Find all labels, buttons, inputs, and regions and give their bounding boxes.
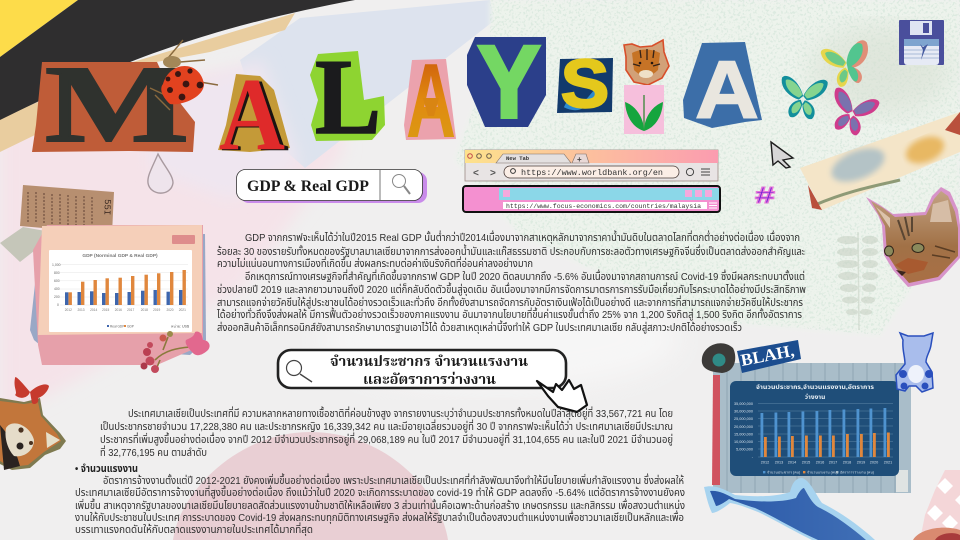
text block: population [100, 406, 673, 459]
chart: population and labour force: 2015 [802, 460, 810, 464]
text block: GDP explanation: ความไม่แน่นอนทางการเมืองที่เกิดขึ้น ส่งผลกระทบต่อค่าเงินริงกิตที่อ่อนค่าลงอย่างมาก [217, 256, 533, 270]
chart: population and labour force [730, 381, 899, 476]
title letter M [32, 43, 195, 165]
text block: labour force: บรรเทาแรงกดดันให้กับตลาดแรงงานภายในประเทศได้มากที่สุด [75, 522, 313, 536]
chart: nominal GDP and real GDP: 600 [54, 279, 60, 283]
butterfly yellow [820, 39, 875, 90]
browser window: worldbank: < [473, 168, 479, 179]
water drop sticker [148, 154, 173, 193]
cat head sticker [866, 187, 960, 287]
text block: GDP explanation: ร้อยละ 30 ของรายรับทั้งหมดของรัฐบาลมาเลเซียมาจากการส่งออกน้ำมันและแก๊สธรรมชาติ ประกอบกับการชะลอตัวทางเศรษฐกิจจีนซึ่งเป็นตลาดส่งออกสำคัญและ [217, 244, 805, 258]
chart: population and labour force: 15,000,000 [734, 432, 753, 436]
chart: population and labour force: จำนวนประชากร (คน) [767, 470, 800, 474]
browser window: worldbank: > [490, 168, 496, 179]
title letter Y: Y [478, 25, 540, 139]
text block: labour force: งานให้กับประชาชนในประเทศ การระบาดของ Covid-19 ส่งผลกระทบทุกมิติทางเศรษฐกิจ ส่งผลให้รัฐบาลจำเป็นต้องสงวนตำแหน่งงานเพื่อชาวมาเลเซียเป็นหลักและเพื่อ [75, 510, 684, 524]
red panda sticker with bow [0, 377, 66, 470]
icon: butterflies [778, 39, 880, 139]
chart: nominal GDP and real GDP: Real GDP [110, 324, 124, 328]
chart: nominal GDP and real GDP: หน่วย: US$ [171, 324, 189, 328]
BLAH sticker: BLAH, [739, 341, 796, 370]
chart: nominal GDP and real GDP: 2016 [115, 308, 122, 312]
ruler scrap: 55I [101, 199, 112, 215]
chart: nominal GDP and real GDP: 1,000 [52, 263, 61, 267]
icon: ladybug [150, 40, 218, 110]
chart: population and labour force: อัตราการว่างงาน (คน) [840, 470, 874, 474]
browser window: worldbank: https://www.worldbank.org/en [521, 168, 663, 178]
title letter L green: L [315, 38, 381, 157]
text block: population: ประชากรที่เพิ่มสูงขึ้นอย่างต่อเนื่อง จากปี 2012 มีจำนวนประชากรอยู่ที่ 29,068,189 คน ในปี 2017 มีจำนวนอยู่ที่ 31,104,655 คน และในปี 2021 มีจำนวนอยู่ [100, 432, 673, 446]
text block: GDP explanation: ส่งออกสินค้าอิเล็กทรอนิกส์ยังสามารถรักษามาตรฐานเอาไว้ได้ ด้วยสาเหตุเหล่านี้จึงทำให้ GDP ในประเทศมาเลเซีย กลับสู่สภาวะปกติได้อย่างรวดเร็ว [217, 320, 742, 334]
chart: population and labour force: 2019 [857, 460, 865, 464]
text block: population: ที่ 32,776,195 คน ตามลำดับ [100, 445, 207, 459]
chart: nominal GDP and real GDP: 800 [54, 271, 60, 275]
text block: labour force: อัตราการจ้างงานตั้งแต่ปี 2012-2021 ยังคงเพิ่มขึ้นอย่างต่อเนื่อง เพราะประเทศมาเลเซียเป็นประเทศที่กำลังพัฒนาจึงทำให้มีนโยบายเพิ่มกำลังแรงงาน ซึ่งส่งผลให้ [103, 473, 684, 487]
title letter A red: A [219, 57, 285, 172]
chart: population and labour force: 2014 [788, 460, 796, 464]
chart: nominal GDP and real GDP: 2012 [65, 308, 72, 312]
whale sticker [704, 478, 875, 540]
chart: population and labour force: 2021 [884, 460, 892, 464]
text block: population: เป็นประชากรชายจำนวน 17,228,380 คน และประชากรหญิง 16,339,342 คน และมีอายุเฉลี่ยรวมอยู่ที่ 30 ปี จากกราฟจะเห็นได้ว่า ประเทศมาเลเซียมีประมาณ [100, 419, 673, 433]
checkered cloth and fruit [913, 470, 960, 540]
chart: nominal GDP and real GDP: 2019 [153, 308, 160, 312]
chart: nominal GDP and real GDP: 200 [54, 295, 60, 299]
browser window: worldbank: + [577, 155, 582, 164]
browser window: focus-economics: https://www.focus-economics.com/countries/malaysia [506, 203, 701, 210]
browser window: worldbank [465, 150, 718, 181]
corner: yellow and dark bands [0, 0, 355, 152]
chart: nominal GDP and real GDP: 2014 [90, 308, 97, 312]
text block: GDP explanation: อีกเหตุการณ์ทางเศรษฐกิจที่สำคัญที่เกิดขึ้นจากกราฟ GDP ในปี 2020 ติดลบมากถึง -5.6% อันเนื่องมาจากสถานการณ์ Covid-19 ซึ่งมีผลกระทบมาตั้งแต่ [245, 269, 805, 283]
icon: floppy disk [899, 20, 944, 65]
text block: GDP explanation: สามารถแจกจ่ายวัคซีนให้สู่ประชาชนได้อย่างรวดเร็วและทั่วถึง อีกทั้งยังสามารถจัดการกับอัตราเงินเฟ้อได้เป็นอย่างดี และจากการที่สามารถแจกจ่ายวัคซีนให้ประชากร [217, 295, 803, 309]
chart: population and labour force: 2017 [829, 460, 837, 464]
text block: labour force: เพิ่มขึ้น สาเหตุจากรัฐบาลของมาเลเซียมีนโยบายลดสัดส่วนแรงงานข้ามชาติให้เหลือเพียง 3 ส่วนเท่านั้นคือเฉพาะด้านก่อสร้าง เกษตรกรรม และกสิกรรม เพื่อสงวนตำแหน่ง [75, 498, 685, 512]
butterfly teal [778, 75, 828, 121]
icon: hash sticker: # [755, 182, 775, 208]
chart: nominal GDP and real GDP: 2020 [166, 308, 174, 312]
chart: population and labour force: 20,000,000 [734, 425, 753, 429]
search bar: GDP and Real GDP: GDP & Real GDP [247, 178, 370, 195]
text block: labour force: ประเทศมาเลเซียมีอัตราการจ้างงานที่สูงขึ้นอย่างต่อเนื่อง ถึงแม้ว่าในปี 2020 จะเกิดการระบาดของ covid-19 ทำให้ GDP ลดลงถึง -5.64% แต่อัตราการจ้างงานยังคง [75, 485, 685, 499]
title letter S: S [561, 46, 609, 122]
chart: nominal GDP and real GDP: 2015 [102, 308, 109, 312]
chart: nominal GDP and real GDP: 2021 [179, 308, 186, 312]
text block: labour force [75, 473, 685, 536]
chart: nominal GDP and real GDP [49, 250, 192, 332]
browser window: worldbank: New Tab [506, 155, 530, 162]
flower sprig [140, 331, 210, 373]
chart: population and labour force: 2012 [761, 460, 769, 464]
chart: population and labour force: 2016 [816, 460, 824, 464]
title letter A blue: A [695, 45, 759, 136]
title letter A orange: A [406, 42, 456, 160]
browser window: focus-economics [463, 186, 720, 212]
search bar: population, labour, unemployment: จำนวนประชากร จำนวนแรงงาน [330, 354, 528, 370]
chart: population and labour force: 25,000,000 [734, 417, 753, 421]
gummy bear sticker [896, 333, 933, 392]
chart: population and labour force: จำนวนประชากร,จำนวนแรงงาน,อัตราการ [756, 383, 875, 391]
title letter A red: A [221, 58, 289, 173]
search bar: population, labour, unemployment: และอัตราการว่างงาน [363, 371, 496, 388]
icon: arrow cursor [771, 142, 793, 168]
chart: population and labour force: 30,000,000 [734, 410, 753, 414]
icon: pointing hand [537, 380, 587, 412]
fern leaf [837, 232, 878, 330]
panel: GDP chart on paper stack [30, 225, 206, 365]
torn tape piece [0, 227, 57, 262]
chart: population and labour force: 35,000,000 [734, 402, 753, 406]
text block: GDP explanation: ช่วงปลายปี 2019 และลากยาวมาจนถึงปี 2020 แต่ก็กลับดีดตัวขึ้นสู่จุดเดิม อันเนื่องมาจากมีการจัดการมาตรการการรับมือเกี่ยวกับโรคระบาดได้อย่างมีประสิทธิภาพ [217, 282, 806, 296]
red bow [15, 377, 49, 404]
search bar: GDP and Real GDP [236, 170, 427, 203]
chart: population and labour force: ว่างงาน [805, 393, 825, 401]
panel: population chart on striped paper [712, 363, 911, 493]
chart: population and labour force: - [752, 456, 754, 460]
chart: population and labour force: จำนวนแรงงาน (คน) [807, 470, 838, 474]
chart: nominal GDP and real GDP: 0 [57, 303, 59, 307]
chart: population and labour force: 2020 [870, 460, 878, 464]
text block: population: ประเทศมาเลเซียเป็นประเทศที่มี ความหลากหลายทางเชื้อชาติที่ค่อนข้างสูง จากรายงานระบุว่าจำนวนประชากรทั้งหมดในปีล่าสุดอยู่ที่ 33,567,721 คน โดย [128, 406, 673, 420]
chart: population and labour force: 5,000,000 [736, 448, 753, 452]
text block: GDP explanation: ได้อย่างทั่วถึงจึงส่งผลให้ มีการฟื้นตัวอย่างรวดเร็วของภาคแรงงาน อันมาจากนโยบายที่ขึ้นค่าแรงขั้นต่ำถึง 25% จาก 1,200 ริงกิตสู่ 1,500 ริงกิต อีกทั้งอัตราการ [216, 307, 802, 321]
chart: population and labour force: 2013 [775, 460, 783, 464]
chart: population and labour force: 10,000,000 [734, 440, 753, 444]
text block: GDP explanation: GDP จากกราฟจะเห็นได้ว่าในปี2015 Real GDP นั้นต่ำกว่าปี2014เนื่องมาจากสาเหตุหลักมาจากราคาน้ำมันดิบในตลาดโลกที่ตกต่ำอย่างต่อเนื่อง เนื่องจาก [245, 230, 800, 244]
ruler scrap [20, 185, 114, 234]
title letter A orange [404, 42, 456, 160]
chart: nominal GDP and real GDP: 2013 [77, 308, 85, 312]
pom flower sticker [702, 343, 735, 373]
title letter M: M [45, 43, 189, 165]
chart: nominal GDP and real GDP: 400 [54, 287, 60, 291]
washi tape [800, 112, 960, 210]
chart: nominal GDP and real GDP: 2017 [127, 308, 134, 312]
chart: nominal GDP and real GDP: 2018 [141, 308, 148, 312]
chart: nominal GDP and real GDP: GDP [127, 324, 134, 328]
search bar: population, labour, unemployment [278, 350, 587, 412]
butterfly magenta [824, 87, 880, 139]
chart: nominal GDP and real GDP: GDP (Norminal GDP & Real GDP) [82, 253, 158, 259]
heading: labour force bullet: • จำนวนแรงงาน [75, 463, 138, 475]
text block: GDP explanation [216, 230, 806, 334]
chart: population and labour force: 2018 [843, 460, 851, 464]
title letter I: tulip card [624, 85, 664, 134]
title letter I: tiger head [624, 40, 669, 85]
